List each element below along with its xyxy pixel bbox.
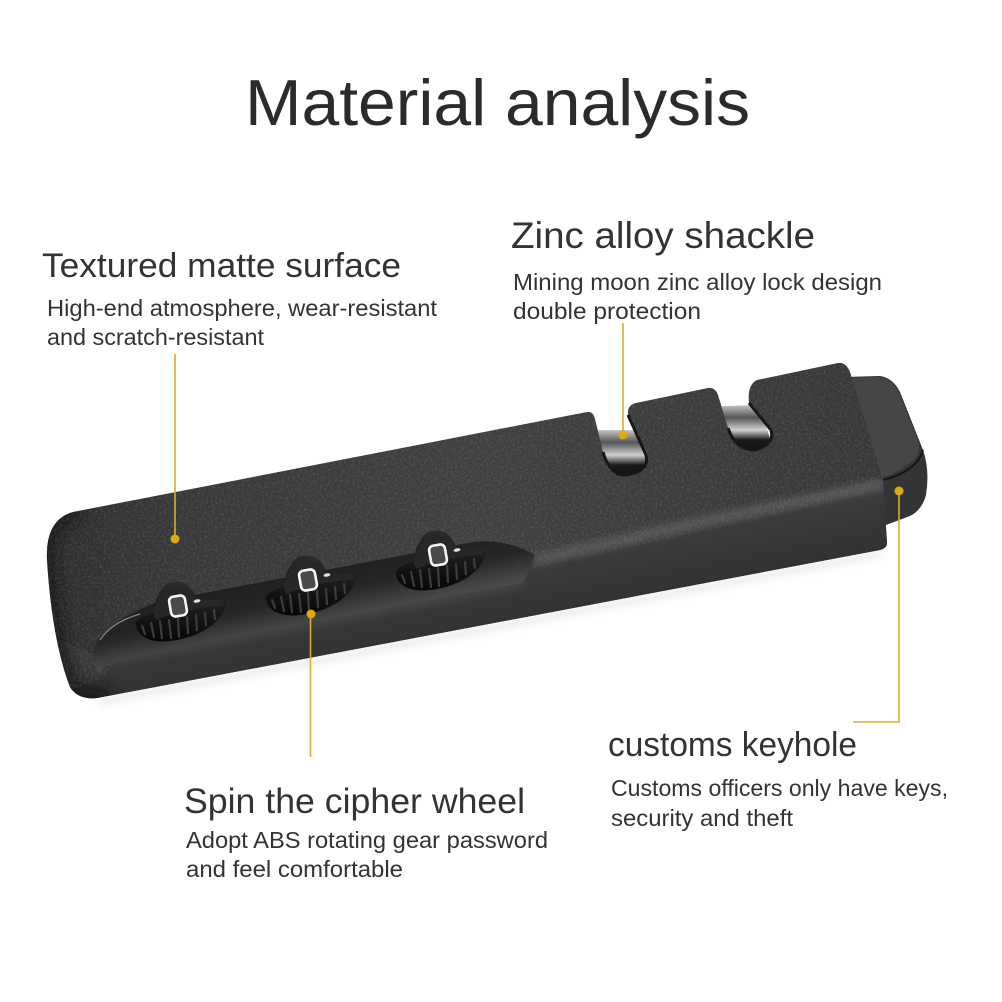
description <box>186 827 548 882</box>
callout: customs keyhole <box>608 726 948 831</box>
heading: customs keyhole <box>608 726 857 764</box>
description <box>47 295 438 350</box>
lock body surface shading and texture <box>40 355 900 700</box>
shadow under lock <box>100 552 880 704</box>
icon: zinc alloy shackle in slots <box>597 405 775 480</box>
icon: end cap <box>845 376 927 525</box>
description: and feel comfortable <box>186 856 403 882</box>
wheel recess channel <box>93 541 535 674</box>
arrow: cipher wheel leader <box>306 610 316 757</box>
description: High-end atmosphere, wear-resistant <box>47 295 438 321</box>
description: Adopt ABS rotating gear password <box>186 827 548 853</box>
arrow: keyhole leader <box>853 486 904 722</box>
heading: Spin the cipher wheel <box>184 782 525 821</box>
title: Material analysis <box>245 66 750 139</box>
heading: Textured matte surface <box>42 247 401 285</box>
callout: zinc alloy shackle <box>511 215 882 324</box>
description: Customs officers only have keys, <box>611 775 948 801</box>
arrow: textured surface leader <box>170 354 180 544</box>
slot rims <box>603 403 772 475</box>
heading: Zinc alloy shackle <box>511 215 815 256</box>
callout: textured matte surface <box>42 247 438 350</box>
lock body top face <box>47 363 887 698</box>
lock body front face <box>60 478 887 698</box>
product: luggage lock <box>40 355 927 704</box>
callout: spin the cipher wheel <box>184 782 548 882</box>
description <box>611 775 948 831</box>
cipher wheel 3 <box>396 531 485 590</box>
description: and scratch-resistant <box>47 324 265 350</box>
description: double protection <box>513 298 701 324</box>
cipher wheel 2 <box>266 556 355 615</box>
description: Mining moon zinc alloy lock design <box>513 269 882 295</box>
recess edge highlights <box>100 614 140 640</box>
cipher wheel 1 <box>136 582 225 641</box>
arrow: shackle leader <box>618 323 628 440</box>
description <box>513 269 882 324</box>
description: security and theft <box>611 805 794 831</box>
